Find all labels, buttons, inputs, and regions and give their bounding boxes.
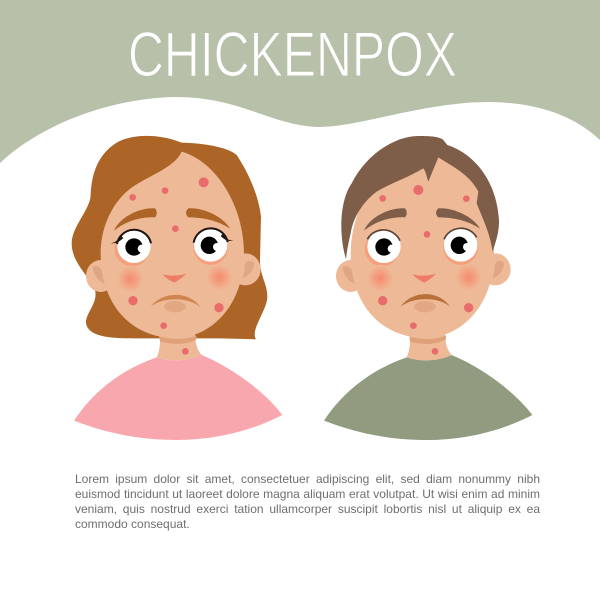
girl neck	[157, 333, 202, 360]
girl mouth	[151, 295, 201, 307]
body text: euismod tincidunt ut laoreet dolore magna aliquam erat volutpat. Ut wisi enim ad minim	[75, 487, 540, 501]
boy chin	[414, 301, 436, 312]
boy neck fold	[409, 335, 446, 344]
boy face	[351, 150, 494, 338]
header wave band	[0, 0, 600, 163]
girl chin	[164, 301, 186, 312]
girl cheeks	[117, 264, 233, 292]
boy nose	[412, 274, 436, 283]
girl spots	[128, 177, 224, 355]
boy illustration	[324, 136, 532, 440]
girl eyebrows	[114, 208, 230, 231]
boy mouth	[401, 294, 450, 307]
boy spots	[378, 185, 473, 355]
boy hair	[341, 136, 499, 259]
boy eyebrows	[364, 208, 480, 231]
body text: Lorem ipsum dolor sit amet, consectetuer adipiscing elit, sed diam nonummy nibh	[75, 472, 540, 486]
girl hair	[72, 136, 267, 339]
body text: commodo consequat.	[75, 517, 190, 531]
boy neck	[407, 333, 452, 360]
girl face	[101, 152, 244, 338]
girl shirt	[74, 355, 282, 440]
title: CHICKENPOX	[128, 20, 457, 90]
body text: veniam, quis nostrud exerci tation ullamcorper suscipit lobortis nisl ut aliquip ex ea	[75, 502, 540, 516]
boy hair highlight	[351, 162, 365, 175]
boy eyes	[365, 228, 478, 266]
boy cheeks	[367, 264, 482, 292]
girl eyes	[111, 228, 233, 266]
boy ears	[336, 253, 511, 292]
girl illustration	[72, 136, 282, 440]
girl ears	[86, 253, 261, 292]
girl nose	[162, 274, 186, 283]
girl neck fold	[159, 335, 197, 344]
boy shirt	[324, 355, 532, 440]
body text	[75, 472, 540, 531]
